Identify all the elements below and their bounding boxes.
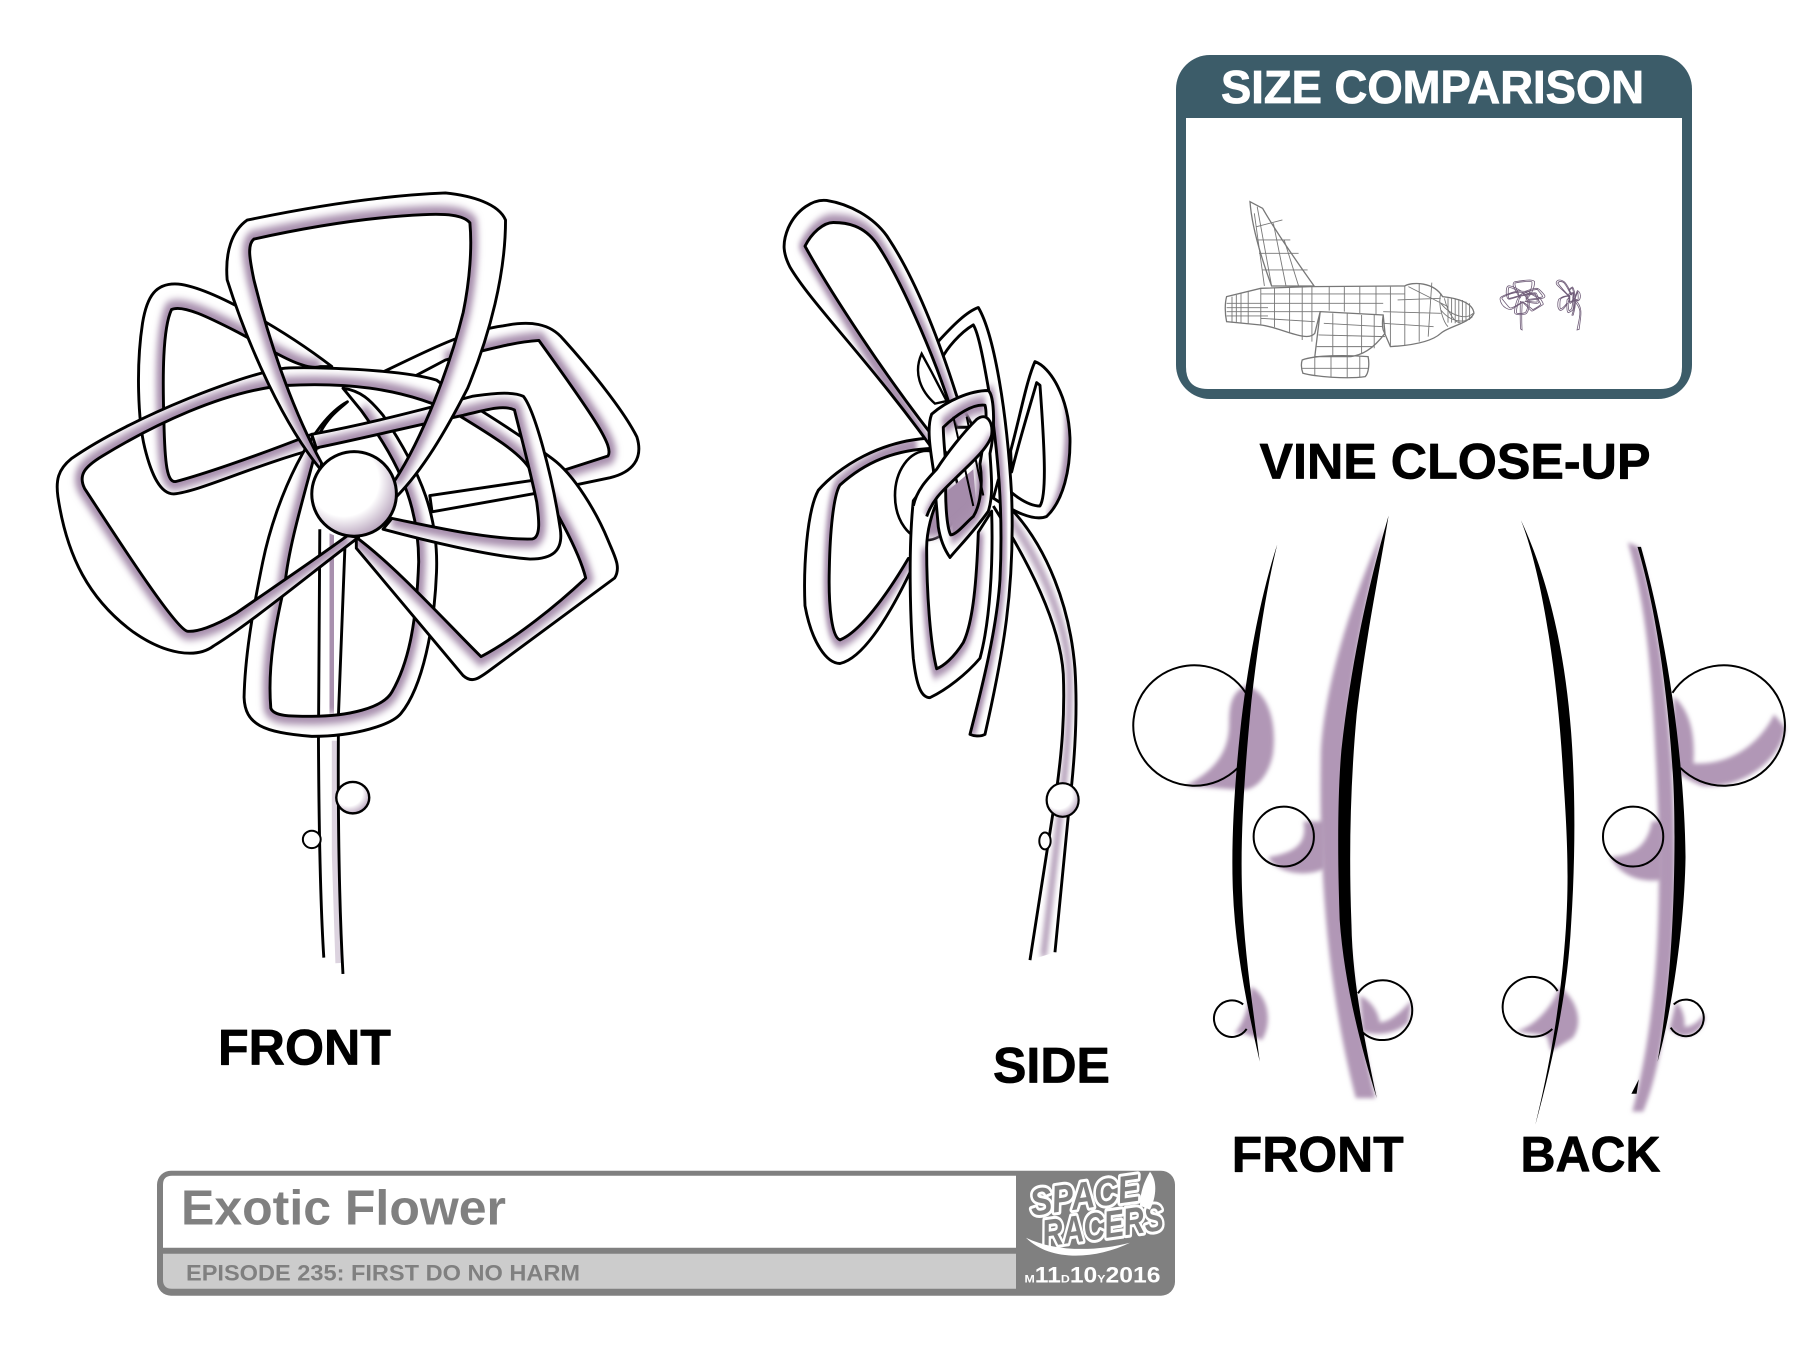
hub shading bbox=[913, 485, 957, 537]
label: flower front: FRONT bbox=[218, 1020, 391, 1076]
long upper petal bbox=[784, 200, 973, 464]
shading on front right strand bbox=[1320, 527, 1384, 1098]
lower petal bbox=[910, 469, 992, 698]
title block bbox=[157, 1168, 1175, 1296]
label: flower side: SIDE bbox=[993, 1038, 1110, 1094]
right small petal bbox=[993, 362, 1070, 522]
shading middle bud bbox=[1268, 821, 1325, 873]
logo word racers: RACERS bbox=[1039, 1197, 1166, 1256]
front left strand bbox=[1232, 545, 1277, 1062]
panel inner area bbox=[1186, 118, 1682, 389]
bottom petal bbox=[244, 388, 437, 736]
shading small bud bbox=[1234, 987, 1268, 1040]
panel heading: SIZE COMPARISON bbox=[1221, 61, 1644, 113]
front right strand bbox=[1338, 516, 1389, 1098]
centre knot petal bbox=[929, 390, 994, 557]
back small loop bbox=[918, 354, 947, 404]
title text: Exotic Flower bbox=[181, 1182, 506, 1236]
stem bud large bbox=[1047, 783, 1079, 817]
shading large bud bbox=[1186, 685, 1274, 790]
top petal bbox=[227, 193, 506, 497]
shading large bud bbox=[1672, 696, 1785, 786]
strand fragment bbox=[1631, 1079, 1639, 1094]
large bud outline bbox=[1133, 665, 1246, 786]
shading on back right strand bbox=[1628, 542, 1675, 1112]
logo word space: SPACE bbox=[1027, 1168, 1144, 1225]
right bud outline bbox=[1358, 980, 1412, 1040]
stem bud small bbox=[303, 831, 321, 848]
mini front flower bbox=[1500, 280, 1545, 330]
logo: space racers bbox=[1026, 1168, 1166, 1256]
title block frame bbox=[157, 1171, 1175, 1296]
inner right petal bbox=[312, 393, 561, 559]
shading left bud bbox=[1516, 987, 1578, 1051]
front stem bbox=[318, 529, 345, 974]
title area bbox=[163, 1176, 1016, 1248]
back left strand bbox=[1521, 520, 1574, 1125]
side hub bbox=[895, 451, 958, 540]
shading middle bud bbox=[1610, 821, 1663, 881]
logo rocket bbox=[1140, 1172, 1155, 1210]
back view vine bbox=[1503, 520, 1785, 1125]
episode text: EPISODE 235: FIRST DO NO HARM bbox=[186, 1261, 580, 1286]
left bud outline bbox=[1503, 977, 1558, 1037]
back right strand bbox=[1637, 547, 1686, 1062]
label: vine back: BACK bbox=[1520, 1126, 1660, 1182]
side stem bbox=[993, 506, 1076, 960]
left petal bbox=[805, 438, 940, 664]
subtitle bar bbox=[163, 1254, 1016, 1289]
panel: size comparison bbox=[1176, 55, 1692, 399]
small bud outline bbox=[1214, 1000, 1247, 1037]
side view flower illustration bbox=[784, 200, 1079, 960]
front view flower illustration bbox=[57, 193, 639, 974]
heading: vine close-up: VINE CLOSE-UP bbox=[1260, 434, 1650, 490]
front view vine bbox=[1133, 516, 1412, 1098]
centre knot shading bbox=[948, 469, 977, 532]
vine close-up illustration bbox=[1133, 516, 1785, 1125]
long tail petal bbox=[937, 308, 1012, 736]
small bud outline bbox=[1671, 1000, 1704, 1036]
label: vine front: FRONT bbox=[1232, 1126, 1404, 1182]
middle bud outline bbox=[1254, 807, 1314, 866]
middle bud outline bbox=[1603, 807, 1663, 866]
knot inner strand bbox=[953, 417, 983, 506]
mini side flower bbox=[1556, 280, 1581, 330]
left and lower-right petals bbox=[57, 368, 617, 680]
stem bud large bbox=[336, 782, 369, 813]
date stamp: M11 D10 Y2016 bbox=[1024, 1263, 1160, 1288]
flower hub bbox=[312, 452, 396, 536]
stem bud small bbox=[1039, 833, 1051, 849]
spaceship wireframe bbox=[1225, 202, 1474, 378]
large bud outline bbox=[1672, 665, 1785, 786]
upper-left petal bbox=[138, 284, 332, 494]
logo swoosh bbox=[1026, 1238, 1130, 1256]
panel frame bbox=[1176, 55, 1692, 399]
knot diagonal strand bbox=[913, 417, 992, 516]
right petal bbox=[383, 323, 639, 512]
shading small bud bbox=[1669, 1002, 1705, 1036]
shading right bud bbox=[1360, 996, 1412, 1034]
